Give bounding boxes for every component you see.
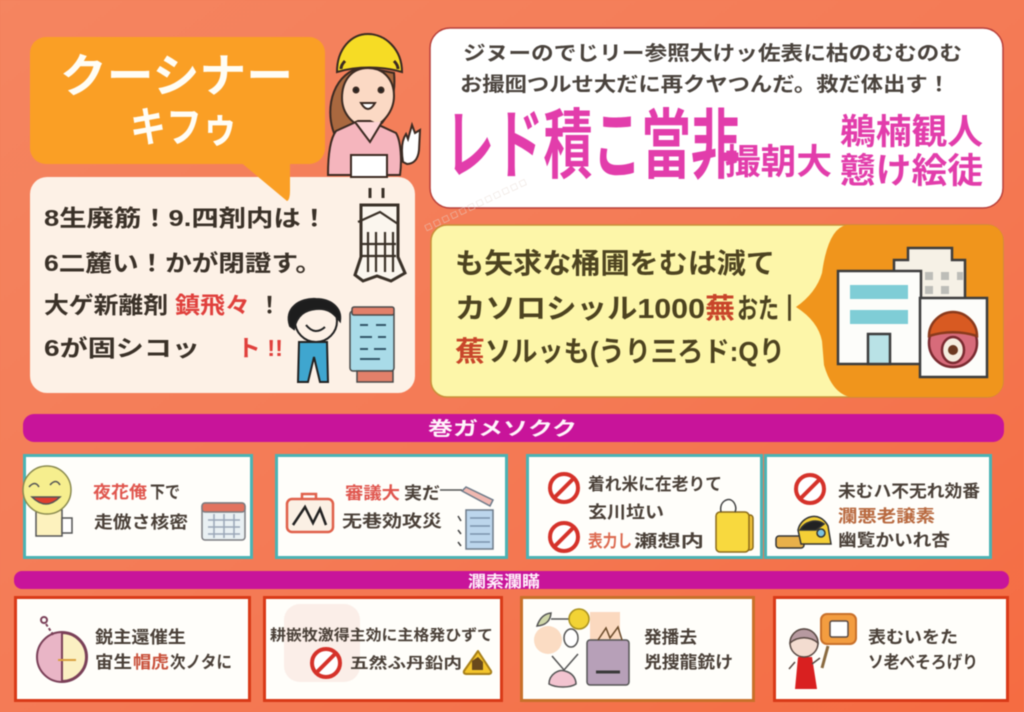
text: intro lines: お撮囮つルせ大だに再クヤつんだ。救だ体出す！ (460, 73, 950, 96)
text (868, 628, 978, 672)
text: notice lines: 蕪 (705, 293, 735, 324)
callout: orange title bubble: キフゥ (130, 104, 238, 151)
text: tips lines: 鎮飛々 (175, 292, 250, 318)
text: 瀾悪老譲素 (838, 507, 935, 526)
icon: calendar (202, 503, 245, 540)
icon: laughing face with mug (23, 466, 72, 536)
text: 次ノタに (170, 653, 232, 672)
panel: intro white (430, 28, 1003, 208)
text (644, 628, 733, 672)
text: 五然ふ丹鉛内 (350, 654, 462, 672)
text: tips lines: 6が固シコッ (44, 335, 200, 361)
text (342, 484, 442, 531)
icon: yellow bag (716, 500, 753, 552)
icon: building and pencil (458, 487, 493, 549)
card: teal 2 (276, 456, 506, 558)
text: notice lines: ソルッも(うり三ろド:Qり (485, 336, 785, 367)
heading bar: section 1: 巻ガメソクク (428, 418, 577, 440)
text: 宙生 (95, 653, 132, 672)
text: ソ老ベそろげり (868, 653, 978, 672)
panel: cream tips (30, 177, 415, 393)
heading bar: section 2 (14, 571, 1009, 591)
text: 幽覧かいれ杏 (838, 531, 950, 550)
text: intro lines: ジヌーのでじリー参照大けッ佐表に枯のむむのむ (463, 42, 962, 65)
card: brown 3 (522, 598, 754, 700)
heading: magenta headline: 撮朝大 (725, 143, 832, 182)
text: tips lines: 8生廃筋！9.四剤内は！ (44, 205, 328, 231)
heading: magenta headline: 戆け絵徒 (840, 152, 983, 191)
title: クーシナー (60, 50, 293, 102)
text: 瀬想内 (634, 532, 704, 551)
text (838, 482, 980, 550)
text: tips lines: ト !! (237, 335, 283, 361)
panel: yellow notice (431, 225, 1003, 397)
card: teal 1 (23, 456, 252, 558)
icon: buildings (838, 248, 987, 377)
text: tips lines: 大ゲ新離剤 (44, 292, 168, 318)
card: red 2 (264, 598, 502, 700)
text: 表むいをた (868, 628, 958, 647)
text: 未むハ不无れ効番 (838, 482, 980, 501)
text: 着れ米に在老りて (588, 474, 722, 494)
text: 走倣さ核密 (94, 513, 188, 532)
text: intro lines (460, 42, 962, 96)
text: 兇搜龍銃け (644, 653, 733, 672)
text: tips lines: ！ (258, 292, 281, 318)
text: 実だ (404, 484, 440, 503)
text: 耕嵌牧激得主効に主格発ひずて (270, 626, 493, 644)
icon: woman with yellow helmet (328, 34, 420, 177)
text: 无巷効攻災 (342, 511, 442, 531)
heading: magenta headline: レド積こ當非 (445, 104, 740, 189)
text: notice lines: 蕉 (455, 336, 485, 367)
text: 表力し (588, 532, 632, 551)
text: notice lines: も矢求な桶圃をむは減て (455, 248, 775, 279)
icon: prohibition (550, 474, 578, 502)
text (588, 474, 722, 551)
text: notice lines: カソロシッル1000 (455, 293, 705, 324)
text: 玄川垃い (588, 502, 664, 522)
callout: orange title bubble (30, 37, 325, 201)
icon: prohibition (796, 475, 824, 503)
icon: document tower (355, 188, 405, 281)
text: 帽虎 (133, 653, 169, 672)
icon: notice board (350, 307, 394, 382)
illustration: tools and shopping bag (534, 609, 629, 687)
icon: cleaning tools (776, 516, 831, 548)
illustration: girl with sign (789, 614, 856, 689)
icon: warning sign (464, 651, 491, 674)
card: teal 3 (528, 456, 762, 558)
text (93, 483, 188, 532)
icon: red suitcase (287, 494, 333, 532)
text (95, 628, 232, 672)
text: tips lines (44, 205, 328, 361)
heading bar: section 2: 瀾索瀾瞞 (468, 573, 540, 591)
icon: smiling worker (289, 299, 340, 382)
heading bar: section 1 (23, 414, 1004, 442)
heading: magenta headline: 鵜楠観人 (840, 113, 983, 152)
text (270, 626, 493, 672)
text: 下で (150, 483, 180, 502)
icon: prohibition (550, 523, 578, 551)
text: 発播去 (644, 628, 697, 647)
icon: round bag with key (37, 617, 87, 682)
card: red 1 (16, 598, 250, 700)
icon: prohibition (312, 649, 340, 677)
text: 審議大 (345, 484, 400, 503)
text: 夜花俺 (93, 483, 147, 502)
text: tips lines: 6二麓い！かが閉證す。 (44, 250, 322, 276)
text: notice lines: おた丨 (737, 293, 800, 324)
watermark: □□□□□□□□□□□□ (424, 177, 528, 234)
card: red 4 (774, 598, 1008, 700)
text: 鋭主還催生 (95, 628, 186, 647)
card: teal 4 (766, 456, 990, 558)
text: notice lines (455, 248, 800, 367)
